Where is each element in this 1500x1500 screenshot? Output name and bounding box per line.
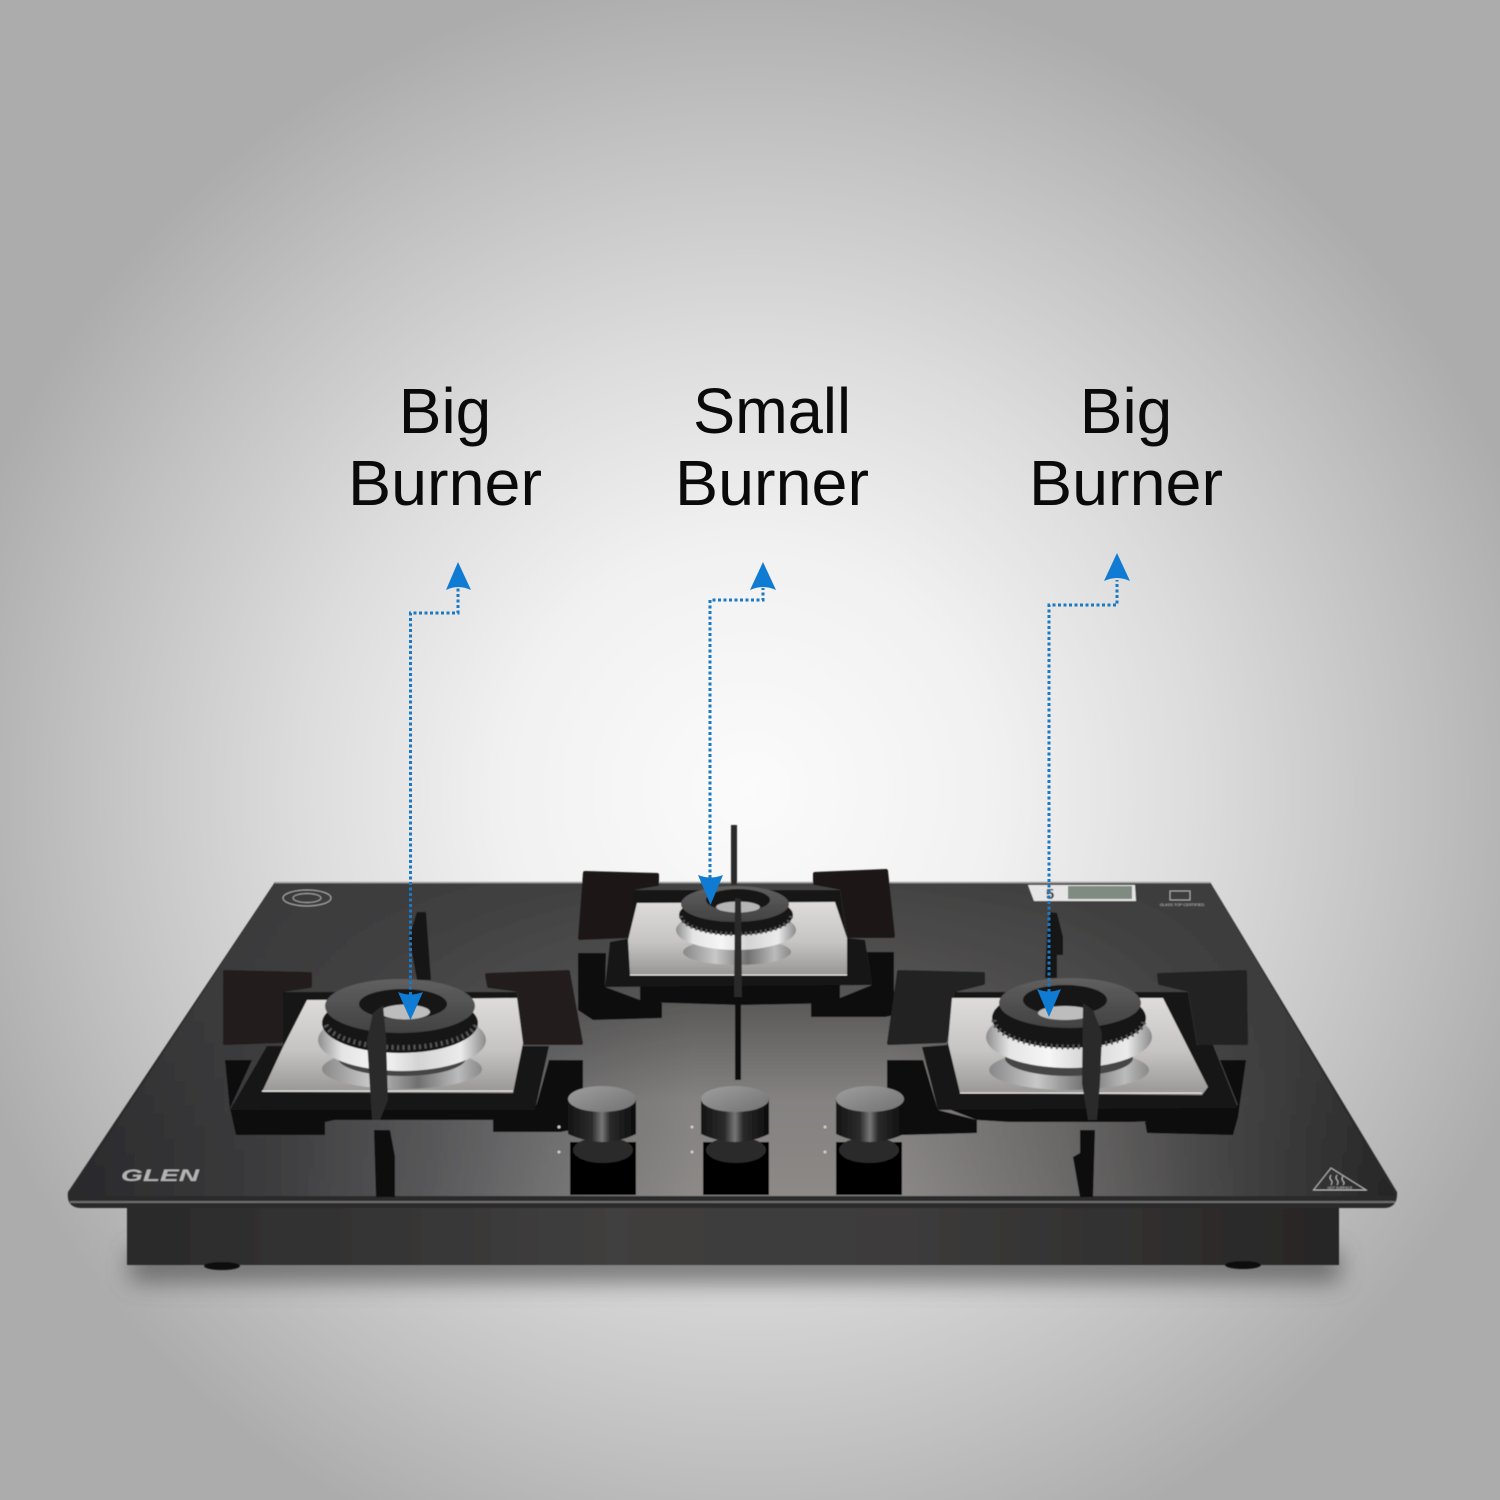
knob: left: [568, 1086, 636, 1195]
right grate arm: back right: [1159, 972, 1246, 1043]
knob: right: [836, 1086, 904, 1195]
hot surface warning: HOT SURFACE: [1328, 1186, 1353, 1190]
label: right big burner: Big: [1080, 375, 1172, 447]
centre black frame: [605, 890, 872, 987]
centre back support: [731, 825, 737, 885]
brand logo: GLEN: [121, 1167, 201, 1185]
label: small burner: Small: [693, 375, 851, 447]
energy rating sticker: [1028, 885, 1136, 903]
left front support: [367, 1005, 388, 1120]
centre steel plate: [628, 902, 847, 975]
glass top: [68, 882, 1397, 1208]
cooktop: [68, 825, 1397, 1270]
knob: middle: [701, 1086, 769, 1195]
label: small burner: [675, 375, 869, 519]
right grate arm: back left: [889, 972, 983, 1043]
left black frame: [230, 992, 549, 1110]
arrow: right burner to label: [1037, 553, 1130, 1017]
right grate reflections: [887, 1060, 1246, 1197]
right steel plate: [948, 998, 1208, 1095]
label: left big burner: [348, 375, 542, 519]
label: right big burner: Burner: [1029, 447, 1223, 519]
logo: small mark: GLASS TOP CERTIFIED: [1160, 902, 1204, 907]
label: small burner: Burner: [675, 447, 869, 519]
cooktop base body: [127, 1205, 1339, 1270]
floor shadow: [130, 1250, 1340, 1282]
arrow: left burner to label: [398, 562, 471, 1020]
centre front support: [734, 898, 742, 997]
logo: certification seal: [283, 890, 331, 906]
left burner: [225, 912, 583, 1197]
centre grate reflections: [578, 952, 894, 1080]
knob markers: [558, 1126, 826, 1154]
left steel plate: [262, 998, 523, 1093]
left grate arm: back right: [487, 972, 581, 1043]
right burner head: [986, 978, 1152, 1090]
energy rating sticker: 5: [1046, 886, 1054, 903]
right black frame: [922, 992, 1238, 1110]
left grate reflections: [225, 1060, 583, 1197]
right front support: [1082, 1003, 1102, 1120]
small burner head: [676, 886, 796, 965]
label: left big burner: Burner: [348, 447, 542, 519]
label: left big burner: Big: [399, 375, 491, 447]
right burner: [887, 912, 1246, 1197]
hot surface warning: [1314, 1168, 1366, 1190]
left burner head: [318, 979, 486, 1089]
right back support: [1045, 912, 1063, 978]
logo: small mark: [1160, 891, 1204, 907]
centre grate arm: back left: [580, 873, 657, 938]
label: right big burner: [1029, 375, 1223, 519]
small burner: [578, 825, 894, 1080]
centre grate arm: back right: [815, 871, 893, 936]
left grate arm: back left: [225, 972, 310, 1043]
arrow: small burner to label: [698, 562, 776, 905]
left back support: [409, 912, 431, 980]
